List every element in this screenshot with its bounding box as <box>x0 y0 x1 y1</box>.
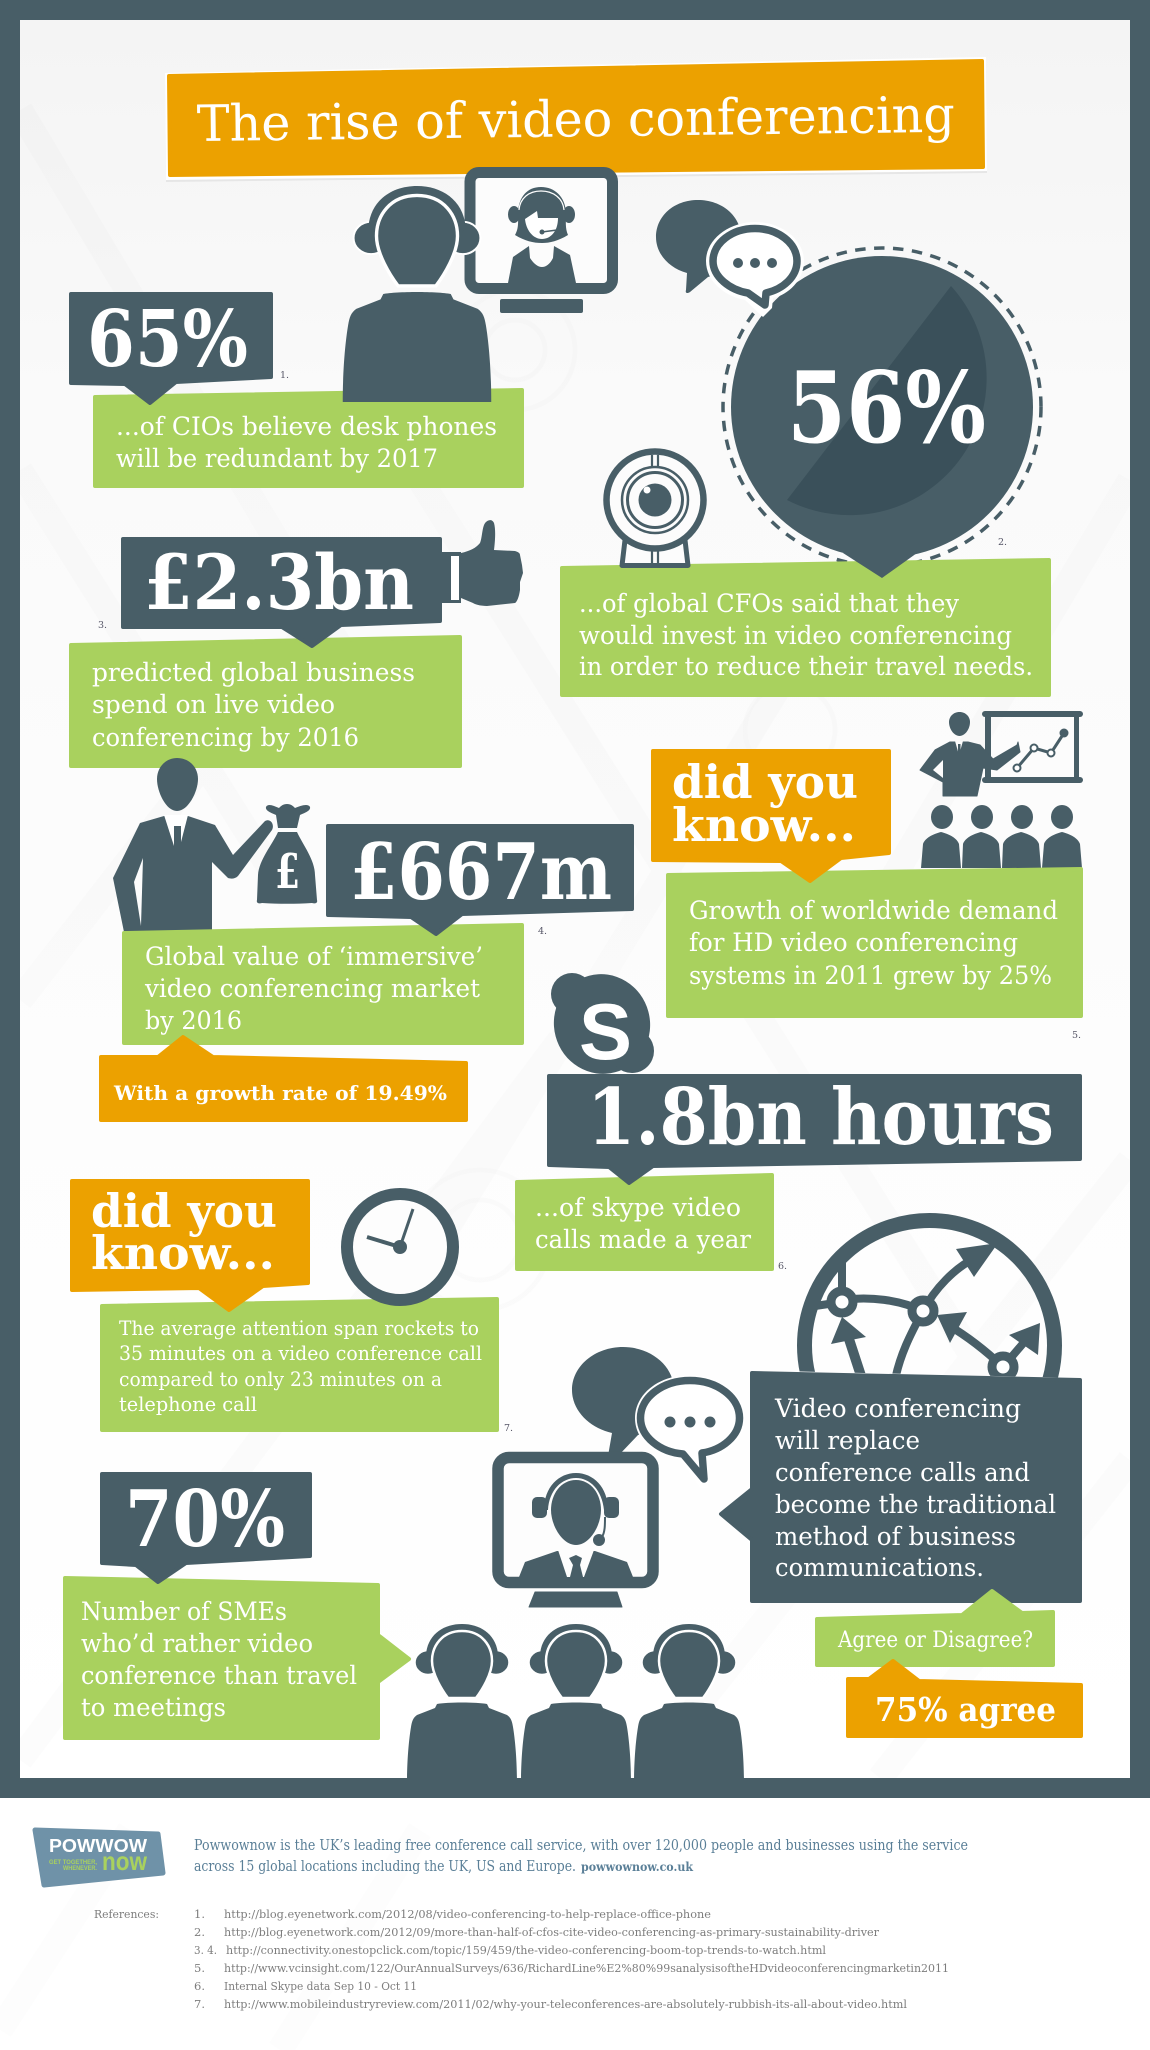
green caption: conferencing by 2016 <box>92 723 359 752</box>
green caption: will be redundant by 2017 <box>116 444 438 473</box>
green caption: to meetings <box>81 1693 226 1722</box>
panel: 56 percent circle: 56% <box>787 351 986 466</box>
icon: listener one <box>407 1624 517 1784</box>
icon: skype <box>543 963 661 1085</box>
references: http://www.mobileindustryreview.com/2011/02/why-your-teleconferences-are-absolutely-rubbish-its-all-about-video.html <box>224 1997 907 2011</box>
panel: statement and poll <box>721 1373 1081 1736</box>
callout: growth rate <box>101 1037 466 1120</box>
agree or disagree: Agree or Disagree? <box>837 1628 1033 1653</box>
statement box: communications. <box>775 1553 984 1582</box>
icon: speech bubbles <box>656 200 804 317</box>
stat box: 1.8bn hours <box>587 1072 1054 1163</box>
references <box>94 1907 949 2011</box>
green caption: The average attention span rockets to <box>119 1316 479 1340</box>
references: 5. <box>194 1961 205 1975</box>
icon: listener three <box>634 1624 744 1784</box>
green caption: Number of SMEs <box>81 1597 287 1626</box>
panel: HD demand <box>653 751 1081 1016</box>
green caption: ...of skype video <box>535 1193 741 1222</box>
statement box: become the traditional <box>775 1490 1056 1519</box>
panel: 667m <box>124 826 632 1043</box>
title banner <box>165 57 987 182</box>
green caption: 35 minutes on a video conference call <box>119 1341 482 1365</box>
icon: monitor with man <box>498 1458 653 1607</box>
references: 7. <box>194 1997 205 2011</box>
icon: skype: S <box>579 987 632 1076</box>
note 2: 2. <box>998 537 1007 548</box>
references: http://www.vcinsight.com/122/OurAnnualSurveys/636/RichardLine%E2%80%99sanalysisoftheHDvideoconferencingmarketin2011 <box>224 1961 949 1975</box>
panel: CFO caption: ...of global CFOs said that they <box>579 589 960 618</box>
statement box <box>721 1373 1080 1601</box>
panel: CFO caption <box>562 553 1049 695</box>
callout: growth rate: With a growth rate of 19.49% <box>113 1081 447 1105</box>
statement box: Video conferencing <box>774 1394 1021 1423</box>
did you know box: know... <box>91 1226 275 1280</box>
panel: CFO caption: in order to reduce their travel needs. <box>579 652 1033 681</box>
green caption: ...of CIOs believe desk phones <box>116 412 497 441</box>
green caption: calls made a year <box>535 1225 751 1254</box>
75 percent agree <box>848 1661 1081 1736</box>
stat box: £667m <box>350 827 612 918</box>
icon: clock <box>347 1194 453 1300</box>
icon: webcam <box>606 452 704 566</box>
panel: 2.3bn <box>71 538 460 766</box>
green caption <box>124 925 522 1043</box>
icon: thumbs up <box>440 520 523 606</box>
green caption: systems in 2011 grew by 25% <box>689 961 1052 990</box>
icon: listener two <box>521 1624 631 1784</box>
frame bottom band <box>0 1778 1150 1798</box>
statement box: method of business <box>775 1522 1016 1551</box>
footer logo: now <box>102 1846 148 1876</box>
note 6: 6. <box>778 1261 787 1272</box>
references: 2. <box>194 1925 205 1939</box>
footer logo: GET TOGETHER, <box>49 1860 97 1866</box>
references: http://blog.eyenetwork.com/2012/09/more-than-half-of-cfos-cite-video-conferencing-as-primary-sustainability-driver <box>224 1925 879 1939</box>
icon: globe network <box>797 1213 1062 1378</box>
green caption: compared to only 23 minutes on a <box>119 1367 442 1391</box>
panel: 56 percent circle <box>723 248 1041 566</box>
icon: man with money bag: £ <box>275 844 300 900</box>
green caption: for HD video conferencing <box>689 928 1018 957</box>
note 7: 7. <box>504 1423 513 1434</box>
green caption <box>65 1578 409 1738</box>
note 3: 3. <box>98 620 107 631</box>
green caption <box>517 1175 772 1269</box>
green caption: by 2016 <box>145 1006 242 1035</box>
company description <box>194 1838 968 1875</box>
75 percent agree: 75% agree <box>875 1690 1056 1729</box>
footer logo: POWWOW <box>49 1836 147 1856</box>
did you know box <box>72 1181 308 1310</box>
references: 6. <box>194 1979 205 1993</box>
references: http://blog.eyenetwork.com/2012/08/video-conferencing-to-help-replace-office-phone <box>224 1907 711 1921</box>
icon: man on headset <box>343 186 491 402</box>
panel: 65 percent <box>71 294 522 486</box>
references: 1. <box>194 1907 205 1921</box>
panel: 70 percent <box>65 1474 409 1738</box>
icon: monitor with woman <box>470 172 612 313</box>
green caption <box>102 1299 497 1430</box>
panel: CFO caption: would invest in video conferencing <box>579 621 1012 650</box>
references: Internal Skype data Sep 10 - Oct 11 <box>224 1979 417 1993</box>
note 4: 4. <box>538 926 547 937</box>
footer logo <box>35 1830 163 1885</box>
green caption <box>71 637 460 766</box>
company description: powwownow.co.uk <box>581 1860 694 1874</box>
references: 3. 4. <box>194 1943 217 1957</box>
green caption: conference than travel <box>81 1661 357 1690</box>
stat box: 70% <box>125 1474 285 1565</box>
note 1: 1. <box>280 370 289 381</box>
footer logo: WHENEVER. <box>63 1866 97 1872</box>
icon: presenter and audience <box>920 711 1083 868</box>
panel: 1.8bn hours <box>517 1072 1080 1269</box>
references: References: <box>94 1907 159 1921</box>
note 5: 5. <box>1072 1030 1081 1041</box>
green caption: Global value of ‘immersive’ <box>145 942 483 971</box>
statement box: conference calls and <box>775 1458 1030 1487</box>
panel: attention span <box>72 1181 497 1430</box>
did you know box: did you <box>91 1184 277 1238</box>
references: http://connectivity.onestopclick.com/topic/159/459/the-video-conferencing-boom-top-trends-to-watch.html <box>226 1943 826 1957</box>
statement box: will replace <box>775 1426 920 1455</box>
did you know box <box>653 751 889 881</box>
did you know box: know... <box>672 798 856 852</box>
company description: across 15 global locations including the UK, US and Europe. <box>194 1859 576 1875</box>
did you know box: did you <box>672 755 858 809</box>
company description: Powwownow is the UK’s leading free conference call service, with over 120,000 people and businesses using the service <box>194 1838 968 1854</box>
icon: speech bubbles two <box>572 1347 745 1488</box>
green caption: Growth of worldwide demand <box>689 896 1058 925</box>
green caption: predicted global business <box>92 658 415 687</box>
icon: man with money bag <box>113 758 317 932</box>
green caption <box>95 390 522 486</box>
green caption: who’d rather video <box>81 1629 313 1658</box>
green caption <box>668 869 1081 1016</box>
stat box: 65% <box>87 294 248 385</box>
stat box: £2.3bn <box>144 538 414 627</box>
title banner: The rise of video conferencing <box>196 86 955 153</box>
agree or disagree <box>817 1591 1053 1665</box>
green caption: telephone call <box>119 1392 257 1416</box>
green caption: video conferencing market <box>144 974 480 1003</box>
green caption: spend on live video <box>92 690 335 719</box>
